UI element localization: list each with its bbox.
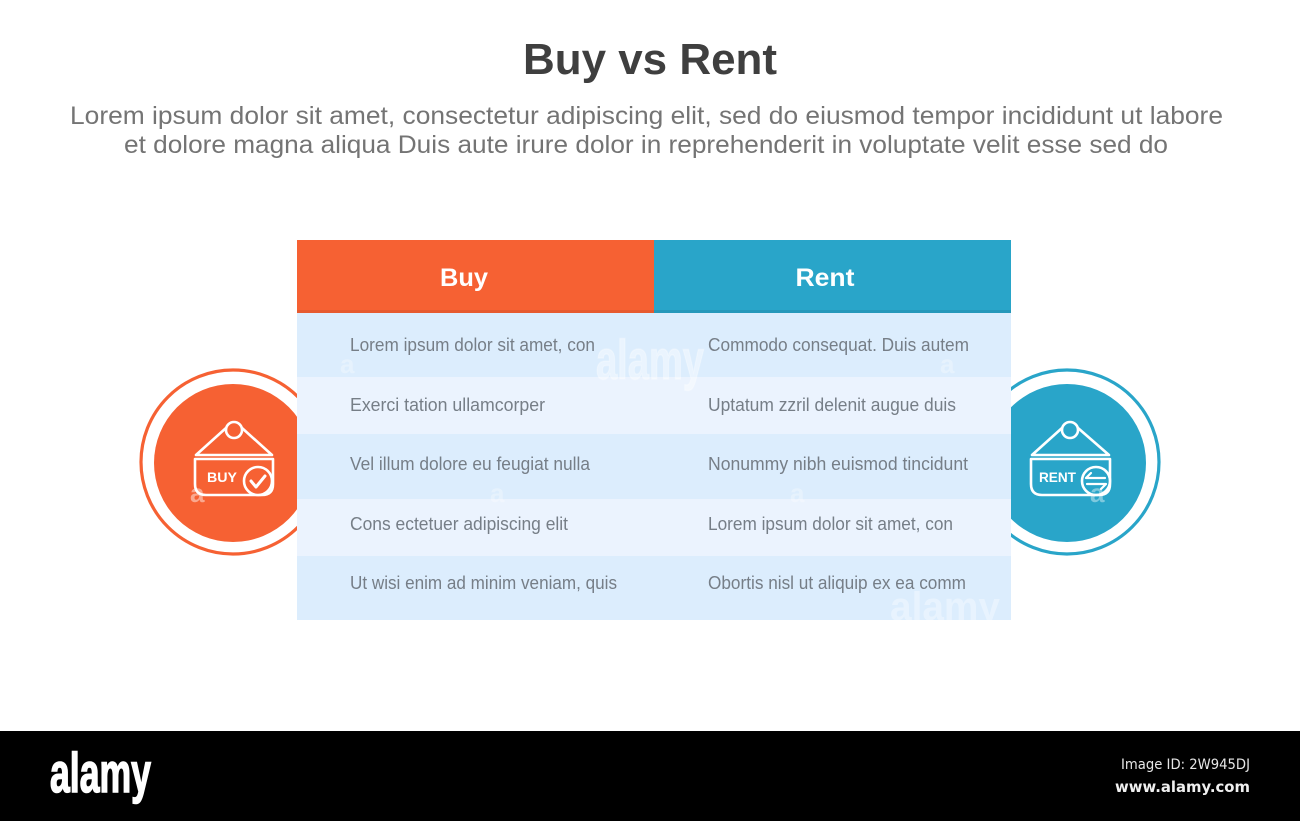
footer bar	[0, 731, 1300, 821]
description text: et dolore magna aliqua Duis aute irure dolor in reprehenderit in voluptate velit esse sed do	[124, 131, 1168, 159]
icon: rent tag	[1031, 422, 1110, 495]
watermark: a	[490, 478, 505, 508]
image id: Image ID: 2W945DJ	[1121, 757, 1250, 773]
watermark: a	[790, 478, 805, 508]
rent circle badge	[975, 370, 1159, 554]
rent column text: Obortis nisl ut aliquip ex ea comm	[708, 573, 966, 593]
icon: buy tag: BUY	[207, 469, 238, 485]
footer logo: alamy	[50, 741, 151, 804]
description text	[70, 102, 1223, 159]
watermark	[190, 328, 1105, 629]
watermark: a	[190, 478, 205, 508]
comparison table	[297, 240, 1011, 620]
header: rent: Rent	[796, 264, 855, 292]
rent column text: Nonummy nibh euismod tincidunt	[708, 454, 968, 474]
table rows background	[297, 313, 1011, 620]
title: Buy vs Rent	[523, 35, 777, 84]
buy column text: Lorem ipsum dolor sit amet, con	[350, 335, 595, 355]
description text: Lorem ipsum dolor sit amet, consectetur adipiscing elit, sed do eiusmod tempor incididunt ut labore	[70, 102, 1223, 130]
watermark: a	[340, 349, 355, 379]
watermark: alamy	[890, 585, 1001, 629]
watermark: alamy	[596, 328, 704, 391]
website: www.alamy.com	[1115, 778, 1250, 796]
rent column text: Uptatum zzril delenit augue duis	[708, 395, 956, 415]
header: buy	[297, 240, 654, 313]
watermark: a	[1090, 478, 1105, 508]
rent column text: Commodo consequat. Duis autem	[708, 335, 969, 355]
header: buy: Buy	[440, 264, 488, 292]
watermark: a	[940, 349, 955, 379]
icon: buy tag	[195, 422, 273, 495]
rent column text: Lorem ipsum dolor sit amet, con	[708, 514, 953, 534]
buy column text	[350, 335, 617, 593]
buy column text: Vel illum dolore eu feugiat nulla	[350, 454, 591, 474]
header: rent	[654, 240, 1011, 313]
rent column text	[708, 335, 969, 593]
buy column text: Cons ectetuer adipiscing elit	[350, 514, 568, 534]
buy column text: Ut wisi enim ad minim veniam, quis	[350, 573, 617, 593]
buy column text: Exerci tation ullamcorper	[350, 395, 545, 415]
buy circle badge	[141, 370, 325, 554]
icon: rent tag: RENT	[1039, 469, 1076, 485]
